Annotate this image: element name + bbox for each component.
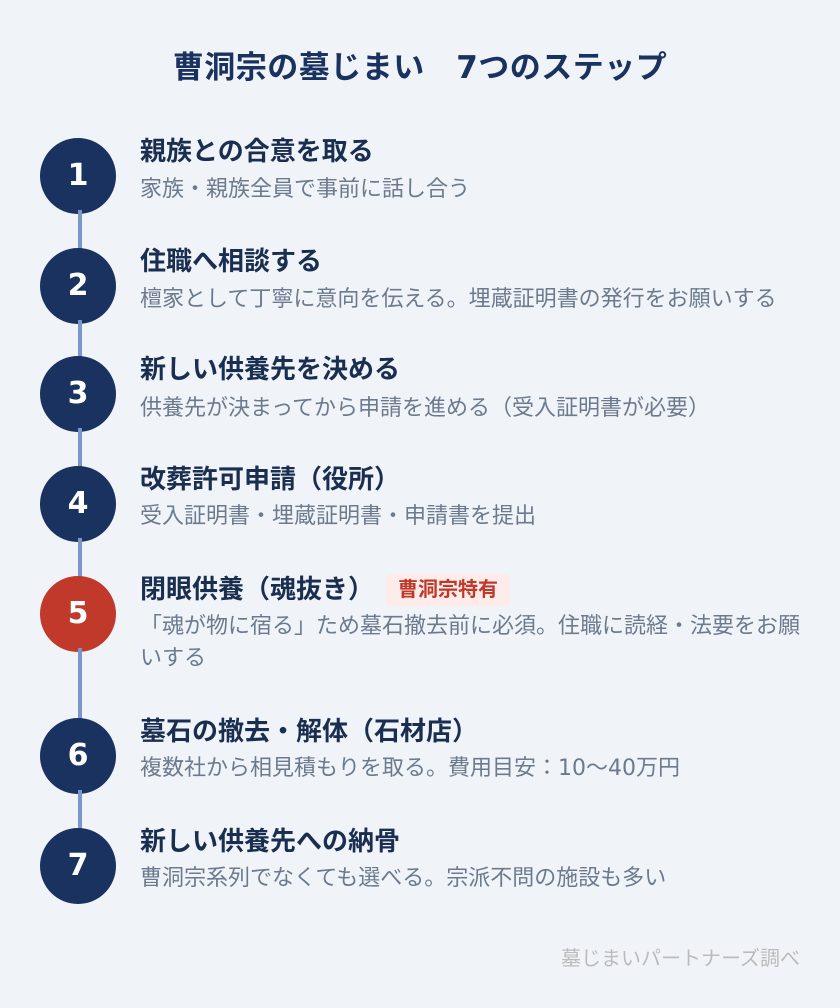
step 5 number: 5 <box>68 596 88 631</box>
step 2 text: 檀家として丁寧に意向を伝える。埋蔵証明書の発行をお願いする <box>140 287 777 312</box>
step 6 number <box>40 718 116 794</box>
step 5 text: いする <box>140 646 206 671</box>
step 7 text: 曹洞宗系列でなくても選べる。宗派不問の施設も多い <box>140 866 666 891</box>
title: 曹洞宗の墓じまい 7つのステップ <box>173 50 667 86</box>
step 6 text: 複数社から相見積もりを取る。費用目安：10〜40万円 <box>140 756 680 781</box>
connector 1-2 <box>78 210 82 250</box>
step 5 text: 「魂が物に宿る」ため墓石撤去前に必須。住職に読経・法要をお願 <box>140 614 800 639</box>
badge: 曹洞宗特有 <box>386 574 510 606</box>
step 3 text: 供養先が決まってから申請を進める（受入証明書が必要） <box>140 396 710 421</box>
step 4 number: 4 <box>68 486 88 521</box>
connector 3-4 <box>78 428 82 468</box>
source note: 墓じまいパートナーズ調べ <box>561 946 800 970</box>
step 2 heading: 住職へ相談する <box>140 247 322 277</box>
step 5 text <box>140 614 800 671</box>
step 6 heading: 墓石の撤去・解体（石材店） <box>140 717 478 747</box>
step 4 heading: 改葬許可申請（役所） <box>140 465 400 495</box>
connector 6-7 <box>78 790 82 830</box>
step 7 heading: 新しい供養先への納骨 <box>140 827 400 857</box>
step 3 number <box>40 356 116 432</box>
step 1 heading: 親族との合意を取る <box>140 137 374 167</box>
step 1 text: 家族・親族全員で事前に話し合う <box>140 177 470 202</box>
step 2 number <box>40 248 116 324</box>
step 4 number <box>40 466 116 542</box>
step 3 heading: 新しい供養先を決める <box>140 355 400 385</box>
badge: 曹洞宗特有: 曹洞宗特有 <box>398 577 498 601</box>
step 7 number <box>40 828 116 904</box>
step 4 text: 受入証明書・埋蔵証明書・申請書を提出 <box>140 504 536 529</box>
step 5 number <box>40 576 116 652</box>
connector 4-5 <box>78 538 82 578</box>
connector 2-3 <box>78 320 82 358</box>
step 6 number: 6 <box>68 738 88 773</box>
step 3 number: 3 <box>68 376 88 411</box>
step 2 number: 2 <box>68 268 88 303</box>
connector 5-6 <box>78 648 82 720</box>
step 7 number: 7 <box>68 848 88 883</box>
step 1 number: 1 <box>68 158 88 193</box>
step 5 heading: 閉眼供養（魂抜き） <box>140 575 374 605</box>
step 1 number <box>40 138 116 214</box>
